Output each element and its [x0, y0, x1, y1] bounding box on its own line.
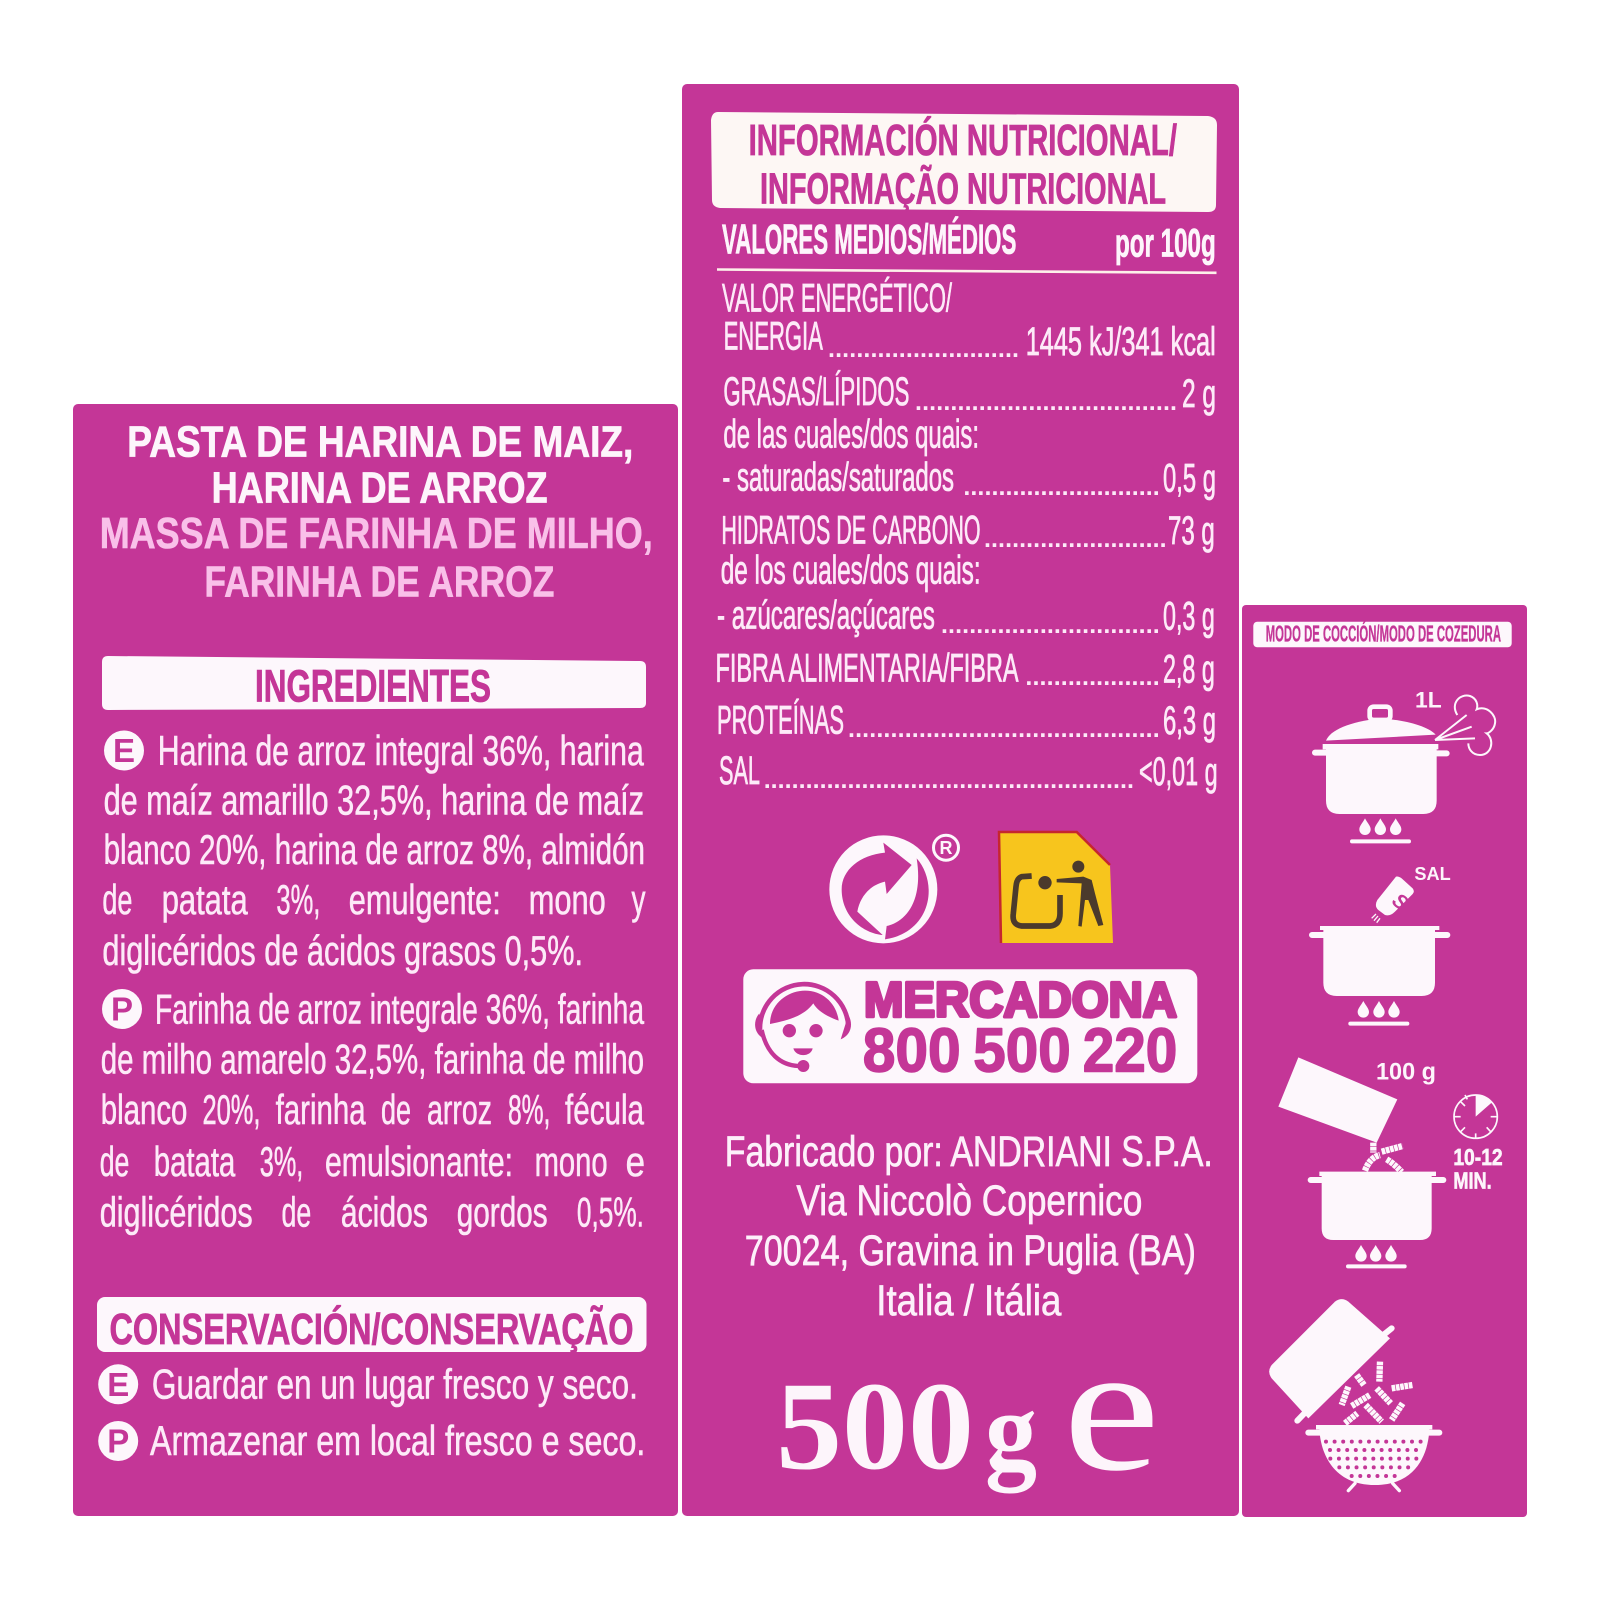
text block: Portuguese ingredients: 0,5%. [577, 1189, 644, 1236]
icon: step 2 salt into pot [1312, 863, 1451, 1026]
icon: step 4 draining into colander [1269, 1299, 1439, 1491]
table row: carbohydrates: 73 g [1168, 509, 1215, 553]
heading: nutrition information: INFORMACIÓN NUTRICIONAL/ [749, 115, 1177, 165]
table row: carbohydrates: .......................... [984, 525, 1167, 553]
heading: nutrition information [711, 112, 1217, 213]
heading: product name in Portuguese: MASSA DE FARINHA DE MILHO, [100, 509, 653, 558]
callout: Mercadona customer phone: 500 [973, 1017, 1071, 1086]
text block: Spanish ingredients: patata [162, 876, 248, 923]
label: cooking time [1453, 1144, 1503, 1193]
text block: Spanish ingredients: blanco 20%, harina de arroz 8%, almidón [104, 826, 645, 873]
text block: manufacturer [725, 1128, 1213, 1325]
text block: Portuguese ingredients: Farinha de arroz integrale 36%, farinha [155, 985, 644, 1032]
text block: Portuguese conservation: Armazenar em local fresco e seco. [150, 1417, 645, 1464]
heading: ingredients [102, 656, 646, 712]
table row: salt: SAL [719, 749, 760, 793]
table row: protein: PROTEÍNAS [717, 697, 844, 742]
net weight: 500 g e: 500 [776, 1357, 974, 1496]
icon: step 3 pasta into pot: 100 g [1376, 1058, 1436, 1085]
text block: Portuguese ingredients: 8%, [508, 1086, 550, 1133]
table row: energy: VALOR ENERGÉTICO/ [722, 276, 952, 321]
table row: fats: ..................................... [915, 388, 1177, 416]
icon: green dot recycling logo [829, 835, 958, 943]
text block: Portuguese ingredients: emulsionante: [325, 1138, 513, 1185]
table row: fibre: 2,8 g [1163, 648, 1215, 692]
table header: average values per 100g: por 100g [1115, 222, 1216, 266]
table row: fibre: ................... [1025, 663, 1160, 691]
text block: Spanish ingredients [102, 727, 645, 974]
table row: of which saturates: de las cuales/dos quais: [723, 412, 979, 456]
text block: Spanish ingredients: de maíz amarillo 32,5%, harina de maíz [104, 776, 644, 823]
table row: fats: 2 g [1182, 372, 1216, 416]
net weight: 500 g e [776, 1308, 1160, 1509]
net weight: 500 g e: e [1063, 1308, 1160, 1509]
net weight: 500 g e: g [985, 1369, 1037, 1493]
heading: nutrition information: INFORMAÇÃO NUTRICIONAL [760, 163, 1166, 213]
text block: Portuguese ingredients: ácidos [341, 1189, 428, 1236]
heading: conservation [97, 1297, 646, 1354]
table row: of which sugars: ............................... [941, 611, 1160, 639]
text block: Spanish conservation: Guardar en un lugar fresco y seco. [152, 1360, 638, 1407]
table row: of which sugars: - azúcares/açúcares [717, 593, 935, 637]
table row: of which saturates: 0,5 g [1163, 457, 1216, 501]
callout: Mercadona customer phone: 800 [863, 1017, 961, 1086]
heading: product name in Portuguese [100, 509, 653, 607]
text block: Portuguese ingredients: e [626, 1138, 645, 1185]
text block: Portuguese conservation: P [107, 1422, 129, 1460]
text block: Portuguese ingredients: batata [154, 1138, 236, 1185]
icon: step 2 salt into pot: SAL [1414, 863, 1451, 884]
text block: manufacturer: Italia / Itália [876, 1277, 1061, 1325]
text block: manufacturer: 70024, Gravina in Puglia (BA) [745, 1227, 1196, 1275]
table row: of which saturates: - saturadas/saturados [722, 456, 954, 500]
heading: conservation: CONSERVACIÓN/CONSERVAÇÃO [110, 1304, 634, 1354]
text block: Portuguese ingredients: de [381, 1086, 411, 1133]
table row: fats: GRASAS/LÍPIDOS [723, 369, 909, 414]
text block: Portuguese ingredients: 3%, [260, 1138, 303, 1185]
heading: cooking method [1253, 620, 1512, 647]
icon: step 1 covered pot with steam [1315, 687, 1495, 843]
icon: tidyman waste symbol [999, 832, 1113, 943]
icon: step 2 salt into pot: S [1387, 889, 1413, 915]
icon: operator with headset [755, 984, 851, 1072]
text block: Portuguese ingredients: arroz [427, 1086, 492, 1133]
callout: Mercadona customer phone [743, 969, 1197, 1086]
text block: Spanish conservation [98, 1360, 638, 1407]
heading: ingredients: INGREDIENTES [255, 661, 491, 712]
table row: salt [719, 749, 1218, 794]
table row: protein: ............................................ [848, 715, 1160, 743]
panel: product and ingredients [73, 404, 678, 1516]
table row: salt: ..................................................... [764, 766, 1134, 794]
text block: Spanish conservation: E [107, 1366, 129, 1403]
text block: Portuguese ingredients [100, 985, 645, 1236]
text block: Portuguese ingredients: de [100, 1138, 129, 1185]
text block: Spanish ingredients: de [102, 876, 132, 923]
table row: fibre: FIBRA ALIMENTARIA/FIBRA [716, 647, 1019, 691]
text block: Portuguese ingredients: diglicéridos [100, 1189, 253, 1236]
text block: Spanish ingredients: mono [529, 876, 606, 923]
table row: fats [723, 369, 1216, 416]
text block: Portuguese ingredients: blanco [101, 1086, 187, 1133]
icon: step 3 pasta into pot [1278, 1057, 1443, 1268]
text block: Portuguese ingredients: farinha [276, 1086, 366, 1133]
table row: energy: ENERGIA [724, 314, 823, 358]
label: cooking time: MIN. [1453, 1167, 1492, 1193]
heading: product name in Spanish: HARINA DE ARROZ [212, 464, 548, 513]
table row: of which saturates [722, 412, 1216, 501]
text block: Portuguese ingredients: fécula [565, 1086, 644, 1133]
text block: Portuguese ingredients: mono [535, 1138, 608, 1185]
table row: energy [722, 276, 1216, 364]
table row: of which sugars: de los cuales/dos quais: [721, 548, 981, 592]
text block: Portuguese ingredients: de [282, 1189, 311, 1236]
table row: of which saturates: ............................ [963, 473, 1160, 501]
table row: carbohydrates: HIDRATOS DE CARBONO [721, 508, 981, 552]
text block: Spanish ingredients: Harina de arroz integral 36%, harina [158, 727, 644, 774]
table row: protein: 6,3 g [1163, 699, 1216, 743]
panel: nutrition and manufacturer [682, 84, 1239, 1516]
callout: Mercadona customer phone: 220 [1083, 1017, 1177, 1086]
icon: step 1 covered pot with steam: 1L [1415, 687, 1442, 712]
table row: protein [717, 697, 1216, 743]
text block: Spanish ingredients: E [113, 732, 135, 769]
text block: Spanish ingredients: emulgente: [349, 876, 501, 923]
icon: green dot recycling logo: R [940, 838, 952, 858]
heading: product name in Spanish: PASTA DE HARINA DE MAIZ, [127, 418, 633, 467]
label: cooking time: 10-12 [1453, 1144, 1503, 1170]
icon: clock timer [1454, 1095, 1497, 1138]
heading: product name in Spanish [127, 418, 633, 513]
text block: manufacturer: Via Niccolò Copernico [796, 1177, 1142, 1225]
text block: manufacturer: Fabricado por: ANDRIANI S.P.A. [725, 1128, 1213, 1176]
text block: Spanish ingredients: y [632, 876, 646, 923]
table row: energy: 1445 kJ/341 kcal [1026, 320, 1216, 364]
text block: Portuguese ingredients: de milho amarelo 32,5%, farinha de milho [101, 1035, 644, 1082]
heading: product name in Portuguese: FARINHA DE ARROZ [204, 558, 554, 607]
panel: cooking instructions [1242, 605, 1527, 1517]
table row: of which sugars [717, 548, 1215, 639]
table header: average values per 100g: VALORES MEDIOS/MÉDIOS [722, 215, 1016, 262]
table row: energy: ........................... [828, 335, 1019, 363]
callout: Mercadona customer phone: MERCADONA [864, 974, 1177, 1028]
text block: Portuguese ingredients: gordos [457, 1189, 548, 1236]
text block: Spanish ingredients: 3%, [276, 876, 320, 923]
text block: Spanish ingredients: diglicéridos de ácidos grasos 0,5%. [102, 927, 583, 974]
text block: Portuguese ingredients: P [111, 990, 133, 1028]
table row: salt: <0,01 g [1139, 750, 1218, 794]
text block: Portuguese ingredients: 20%, [202, 1086, 260, 1133]
table row: of which sugars: 0,3 g [1163, 594, 1215, 638]
